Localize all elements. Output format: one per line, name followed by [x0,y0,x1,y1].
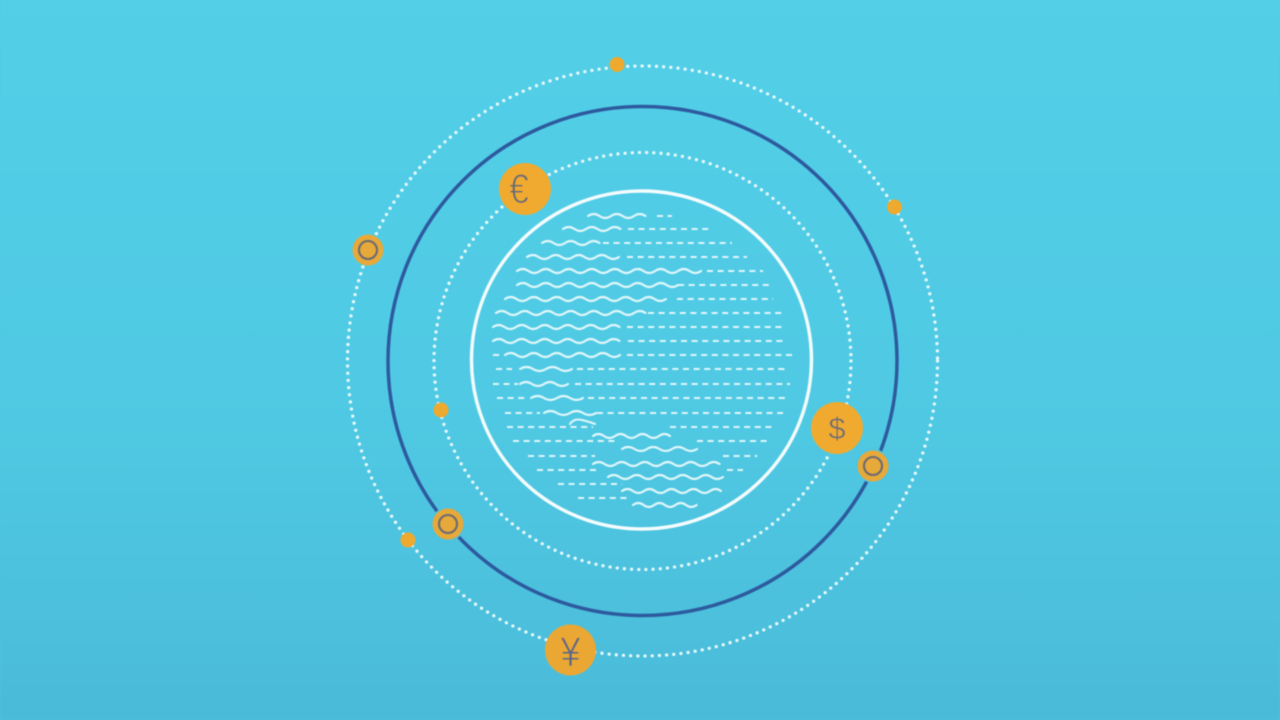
globe ocean: dashed lines [493,216,792,498]
small orange dot: upper right [887,200,902,214]
coin: yen: ¥ [560,629,581,676]
ring coin: lower left [431,507,465,541]
coin: euro: € [509,166,529,213]
outer dotted orbit [348,66,938,656]
ring coin: right [856,449,890,483]
ring coin: upper left [352,234,384,266]
coin: euro [499,163,551,215]
inner dotted orbit [434,152,851,570]
coin: dollar [811,402,863,454]
globe outline [472,191,812,529]
coin: yen [545,624,596,676]
globe land: wavy lines [493,214,723,507]
small orange dot: inner left [434,402,448,418]
navy orbit ring [388,106,897,616]
small orange dot: top [610,57,624,72]
coin: dollar: $ [828,411,846,446]
small orange dot: lower left [400,532,416,548]
